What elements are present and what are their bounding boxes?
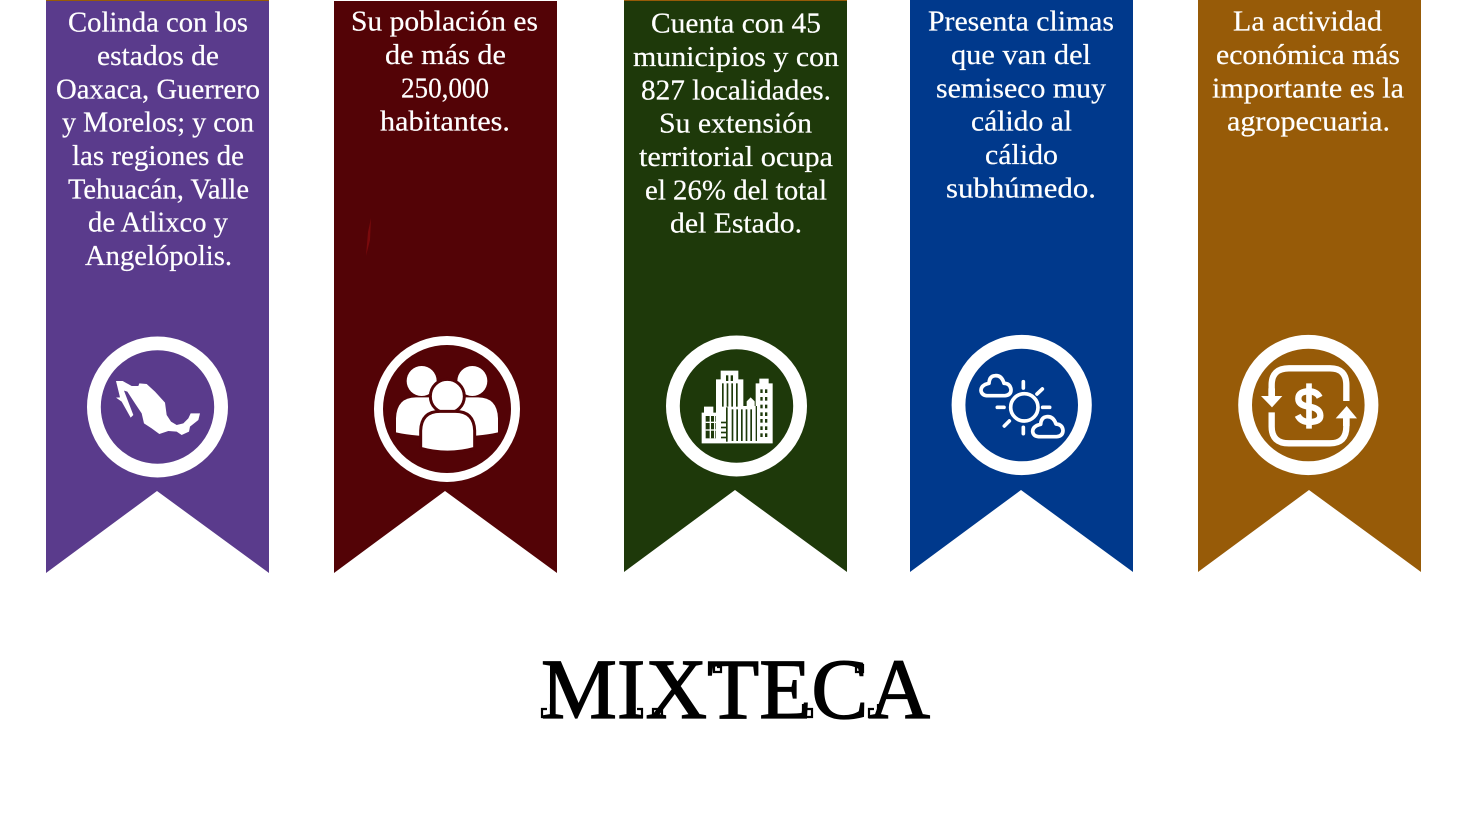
icon ring: purple <box>94 343 221 471</box>
text: colindancias: estados de <box>97 41 219 72</box>
text: colindancias <box>56 8 260 272</box>
icon ring: green <box>673 342 800 470</box>
panel: municipios <box>624 0 847 572</box>
ribbon: ochre <box>1198 0 1421 572</box>
icon: map of Mexico <box>116 381 200 435</box>
icon ring: blue <box>958 342 1085 468</box>
text: poblacion <box>351 7 538 138</box>
icon ring: ochre <box>1245 342 1372 468</box>
ribbon: purple <box>46 0 269 573</box>
text: colindancias: de Atlixco y <box>88 208 228 239</box>
text: municipios: Su extensión <box>659 109 812 140</box>
icon: money cycle <box>1261 368 1357 443</box>
text: climas: Presenta climas <box>928 7 1114 38</box>
text: climas: semiseco muy <box>936 73 1106 104</box>
text: colindancias: Tehuacán, Valle <box>68 174 249 205</box>
ribbon: blue <box>910 0 1133 572</box>
text: municipios <box>633 9 839 240</box>
text: colindancias: y Morelos; y con <box>62 108 254 139</box>
text: actividad economica: importante es la <box>1212 73 1405 104</box>
text: climas: que van del <box>951 40 1091 71</box>
text: municipios: municipios y con <box>633 42 839 73</box>
text: climas: cálido <box>985 140 1058 171</box>
text: actividad economica: económica más <box>1216 40 1400 71</box>
text: climas <box>928 7 1114 204</box>
icon: group of people <box>396 366 498 452</box>
icon: sun and clouds <box>981 376 1063 437</box>
text: poblacion: habitantes. <box>380 107 510 138</box>
text: poblacion: de más de <box>385 40 506 71</box>
text: actividad economica: agropecuaria. <box>1227 107 1390 138</box>
text: poblacion: Su población es <box>351 7 538 38</box>
text: colindancias: Colinda con los <box>68 8 248 39</box>
text: poblacion: 250,000 <box>401 73 489 104</box>
text: municipios: 827 localidades. <box>641 75 831 106</box>
panel: climas <box>910 0 1133 572</box>
text: climas: cálido al <box>971 107 1072 138</box>
text: actividad economica <box>1212 7 1405 138</box>
text: climas: subhúmedo. <box>946 173 1096 204</box>
icon ring: dark red <box>378 340 516 478</box>
ribbon: dark red <box>334 1 557 573</box>
icon: city buildings <box>702 371 773 443</box>
text: actividad economica: La actividad <box>1233 7 1382 38</box>
ribbon: green <box>624 0 847 572</box>
text: municipios: el 26% del total <box>645 175 827 206</box>
text: colindancias: Angelópolis. <box>85 241 232 272</box>
text: municipios: del Estado. <box>670 209 802 240</box>
text: municipios: territorial ocupa <box>639 142 834 173</box>
panel: actividad economica <box>1198 0 1421 572</box>
panel: poblacion <box>334 1 557 573</box>
title: MIXTECA <box>541 641 930 737</box>
text: municipios: Cuenta con 45 <box>651 9 821 40</box>
panel: colindancias <box>46 0 269 573</box>
text: colindancias: Oaxaca, Guerrero <box>56 74 260 105</box>
text: colindancias: las regiones de <box>72 141 244 172</box>
